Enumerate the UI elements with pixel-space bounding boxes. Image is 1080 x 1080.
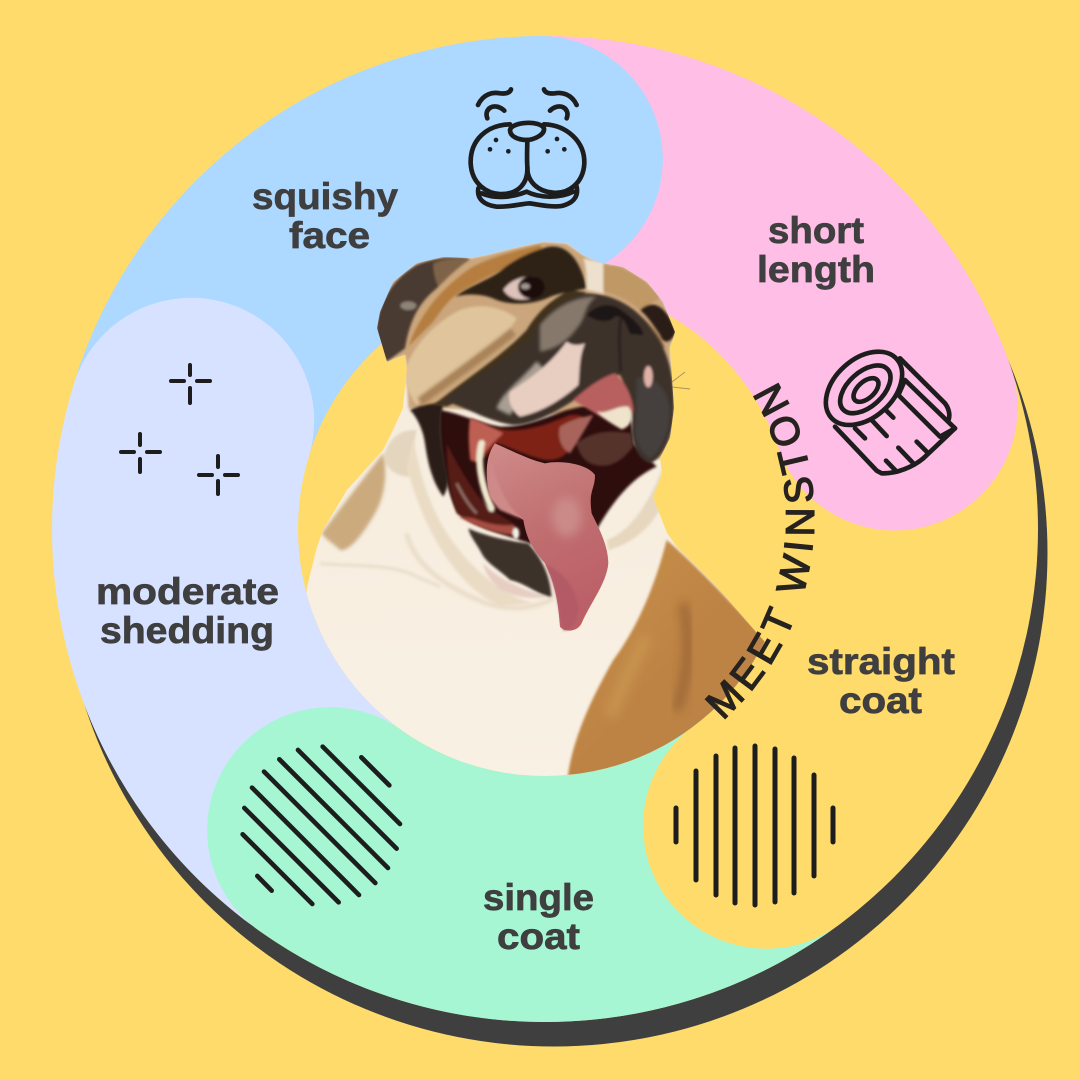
dog: jowl shading: [607, 467, 667, 550]
dog: cheek light: [405, 306, 517, 405]
label: moderate shedding: moderate: [96, 571, 279, 612]
label: straight coat: coat: [839, 680, 922, 721]
dog: head base: [377, 242, 675, 462]
dog: upper palate pink: [573, 373, 633, 428]
dog: philtrum: [619, 318, 621, 372]
label: straight coat: [807, 641, 955, 721]
dog: muzzle grey edge: [497, 362, 547, 415]
dog: eye patch: [455, 247, 587, 304]
dog: gum glare: [457, 483, 477, 513]
dog: tongue underside: [545, 563, 578, 630]
label: short length: length: [757, 249, 875, 290]
dog: mouth cavity: [439, 400, 657, 547]
icon: diagonal lines circle: [243, 747, 400, 904]
segment: squishy face (blue): [195, 159, 540, 408]
dog: iris: [518, 276, 545, 299]
dog: right cheek: [644, 319, 666, 349]
dog: chin dark: [468, 528, 552, 597]
label: moderate shedding: [96, 571, 279, 651]
dog: forehead orange: [408, 245, 545, 347]
icon: bulldog face: [471, 89, 584, 207]
label: squishy face: face: [289, 215, 370, 256]
dog: eye glint: [521, 283, 530, 289]
dog: nose: [587, 305, 643, 335]
dog: palate pink left: [469, 418, 503, 462]
dog: jowl pink: [644, 366, 653, 387]
dog: palate red: [469, 415, 583, 462]
segment: short length (pink): [553, 159, 895, 408]
dog: palate ridge: [559, 415, 593, 453]
dog: base fur: [306, 242, 765, 776]
dog: muzzle dark: [443, 293, 674, 463]
dog: muzzle lower right: [635, 378, 670, 458]
label: squishy face: squishy: [252, 176, 398, 217]
dog: whiskers: [672, 372, 690, 389]
segment: moderate shedding (lavender): [175, 421, 320, 822]
dog: body layer: [320, 430, 790, 787]
dog: right brow: [603, 263, 660, 310]
icon: three sparkles: [121, 365, 238, 494]
dog: right eye patch: [640, 304, 676, 342]
dog: tooth: [513, 527, 519, 539]
dog: muzzle grey mottling: [540, 297, 597, 352]
dog: upper teeth: [597, 406, 632, 429]
dog: eye white: [503, 276, 535, 299]
dog: muzzle pink-white patch: [509, 342, 585, 417]
dog: ear fleck: [400, 301, 416, 310]
label: single coat: single: [483, 877, 594, 918]
dog: blaze: [583, 258, 613, 293]
dog: mouth: [407, 400, 667, 607]
dog: chin pink: [483, 563, 547, 598]
segment: single coat (green): [330, 830, 756, 899]
label: squishy face: [252, 176, 398, 256]
dog: ear: [376, 257, 470, 362]
dog: tongue: [487, 443, 608, 631]
dog: lower lip red: [458, 517, 515, 535]
curved title: MEET WINSTON: [704, 382, 815, 720]
label: short length: short: [768, 210, 864, 251]
dog: left gums: [445, 445, 514, 526]
dog: ear light: [433, 258, 468, 287]
dog: back throat: [577, 431, 633, 466]
dog: cheek tan fold: [420, 332, 513, 402]
dog: head detail: [376, 245, 676, 463]
dog: left dark lip: [410, 403, 448, 497]
icon: vertical lines circle: [676, 746, 833, 905]
label: single coat: coat: [497, 916, 580, 957]
dog: left teeth: [480, 443, 492, 508]
dog: tongue highlight: [552, 497, 582, 537]
dog: under-eye brown: [433, 290, 587, 407]
dog: tongue left fold: [488, 460, 523, 519]
dog: left jowl shading: [407, 440, 533, 607]
segment: straight coat (yellow cap): [643, 703, 889, 949]
label: straight coat: straight: [807, 641, 955, 682]
label: moderate shedding: shedding: [100, 610, 274, 651]
label: short length: [757, 210, 875, 290]
icon: tape measure log: [812, 337, 955, 473]
label: single coat: [483, 877, 594, 957]
dog photo illustration: [290, 230, 790, 800]
